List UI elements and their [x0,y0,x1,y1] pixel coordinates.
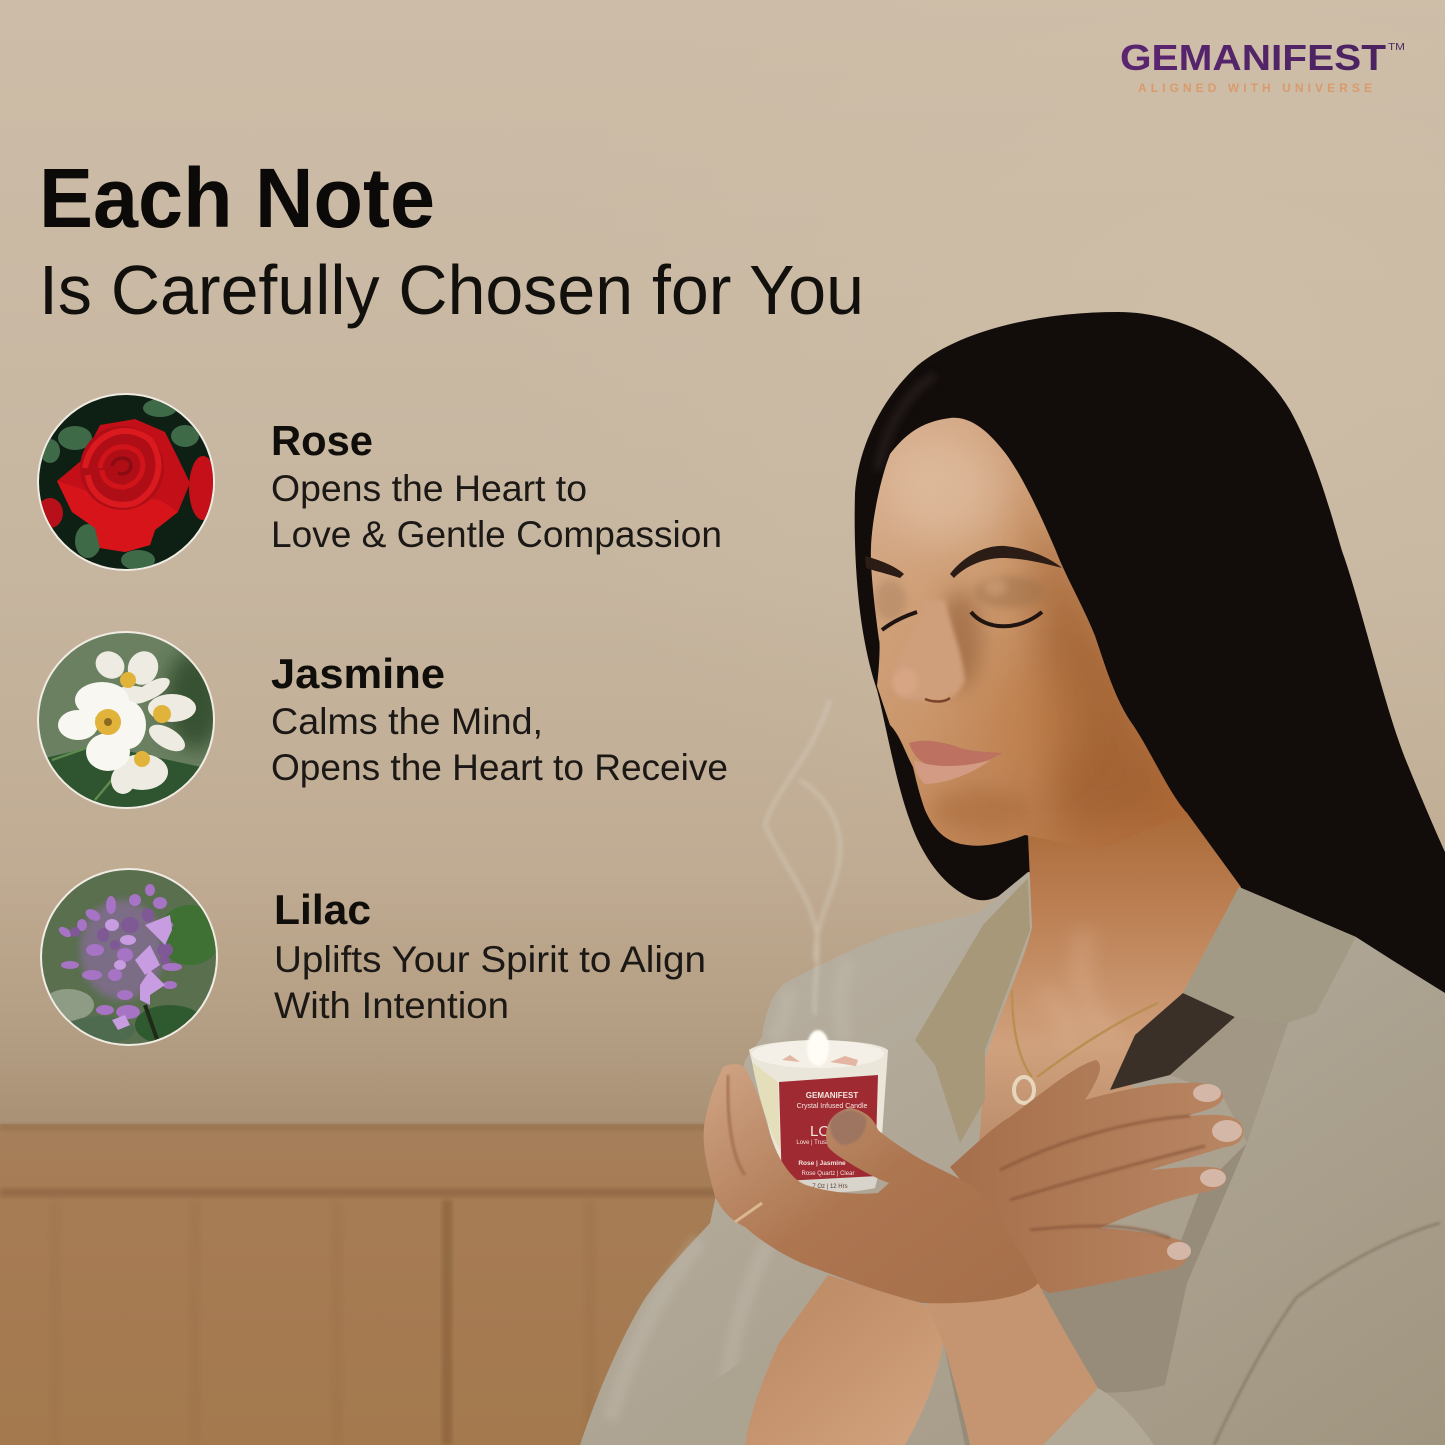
lips [909,741,1003,768]
eyebrows [950,546,1062,578]
left cuff [640,1343,779,1445]
candle label: GEMANIFEST [806,1091,858,1100]
crystals [782,1055,858,1066]
text block: lilac: Lilac [274,886,371,933]
near cuff [1043,1388,1154,1445]
hand on chest [950,1060,1243,1293]
candle label: Rose | Jasmine [798,1160,846,1167]
necklace [1012,990,1158,1077]
title: Is Carefully Chosen for You [39,251,864,329]
pocket edge [1045,1385,1165,1445]
brand logo: GEMANIFEST [1120,37,1386,78]
left collar lapel [915,878,1030,1143]
smoke [765,700,840,1015]
shirt body [580,872,1445,1445]
candle [749,1030,888,1193]
ring [735,1203,762,1222]
text block: rose: Love & Gentle Compassion [271,514,722,555]
text block: jasmine: Calms the Mind, [271,701,543,742]
rear flower [90,646,196,794]
neck light [1045,930,1115,1040]
icon: rose [37,393,217,571]
closed eyes [971,612,1042,626]
hair sheen [878,375,935,470]
candle base [783,1176,878,1193]
candle label: Love | Trust [796,1140,828,1146]
icon: lilac [40,868,222,1046]
right lapel lower [1170,1017,1288,1143]
text block: jasmine: Opens the Heart to Receive [271,747,728,788]
brand logo: TM [1388,42,1405,53]
front flower [58,682,146,771]
shirt chest panel [942,1143,1247,1445]
nose [891,600,965,701]
shirt right sleeve seam [1214,1223,1440,1445]
neck and chest [978,780,1241,1160]
illustration: woman holding candle [580,312,1445,1445]
title [39,151,864,329]
text block: lilac: Uplifts Your Spirit to Align [274,939,706,980]
text block: jasmine: Jasmine [271,650,445,697]
candle label [779,1075,878,1188]
finger lines [1000,1116,1205,1238]
face shading [874,435,1180,835]
shadow under collar [1110,993,1235,1090]
title: Each Note [39,151,435,245]
thumb nail [830,1110,866,1145]
hand holding candle [704,1064,1038,1303]
text block: jasmine [271,650,728,788]
flame [807,1030,829,1066]
fingernails [1167,1084,1242,1260]
candle label: LO [810,1123,830,1140]
finger divider [728,1075,745,1175]
icon: jasmine [37,631,225,809]
face [871,418,1187,850]
candle jar [749,1040,888,1188]
hair [855,312,1445,1000]
text block: rose: Opens the Heart to [271,468,587,509]
candle: 7 Oz | 12 Hrs [812,1184,848,1190]
brand logo: ALIGNED WITH UNIVERSE [1138,81,1372,95]
text block: rose: Rose [271,417,373,464]
far forearm [745,1275,944,1445]
text block: rose [271,417,722,555]
background: wooden wainscot [0,1124,760,1445]
text block: lilac: With Intention [274,985,509,1026]
shirt light folds left [610,960,850,1420]
near forearm [927,1283,1098,1445]
candle label: Crystal Infused Candle [797,1103,868,1110]
brand logo [1120,37,1405,95]
candle label: Rose Quartz | Clear [802,1171,854,1177]
pendant [1014,1077,1034,1103]
right collar [1183,887,1356,1023]
text block: lilac [274,886,706,1026]
